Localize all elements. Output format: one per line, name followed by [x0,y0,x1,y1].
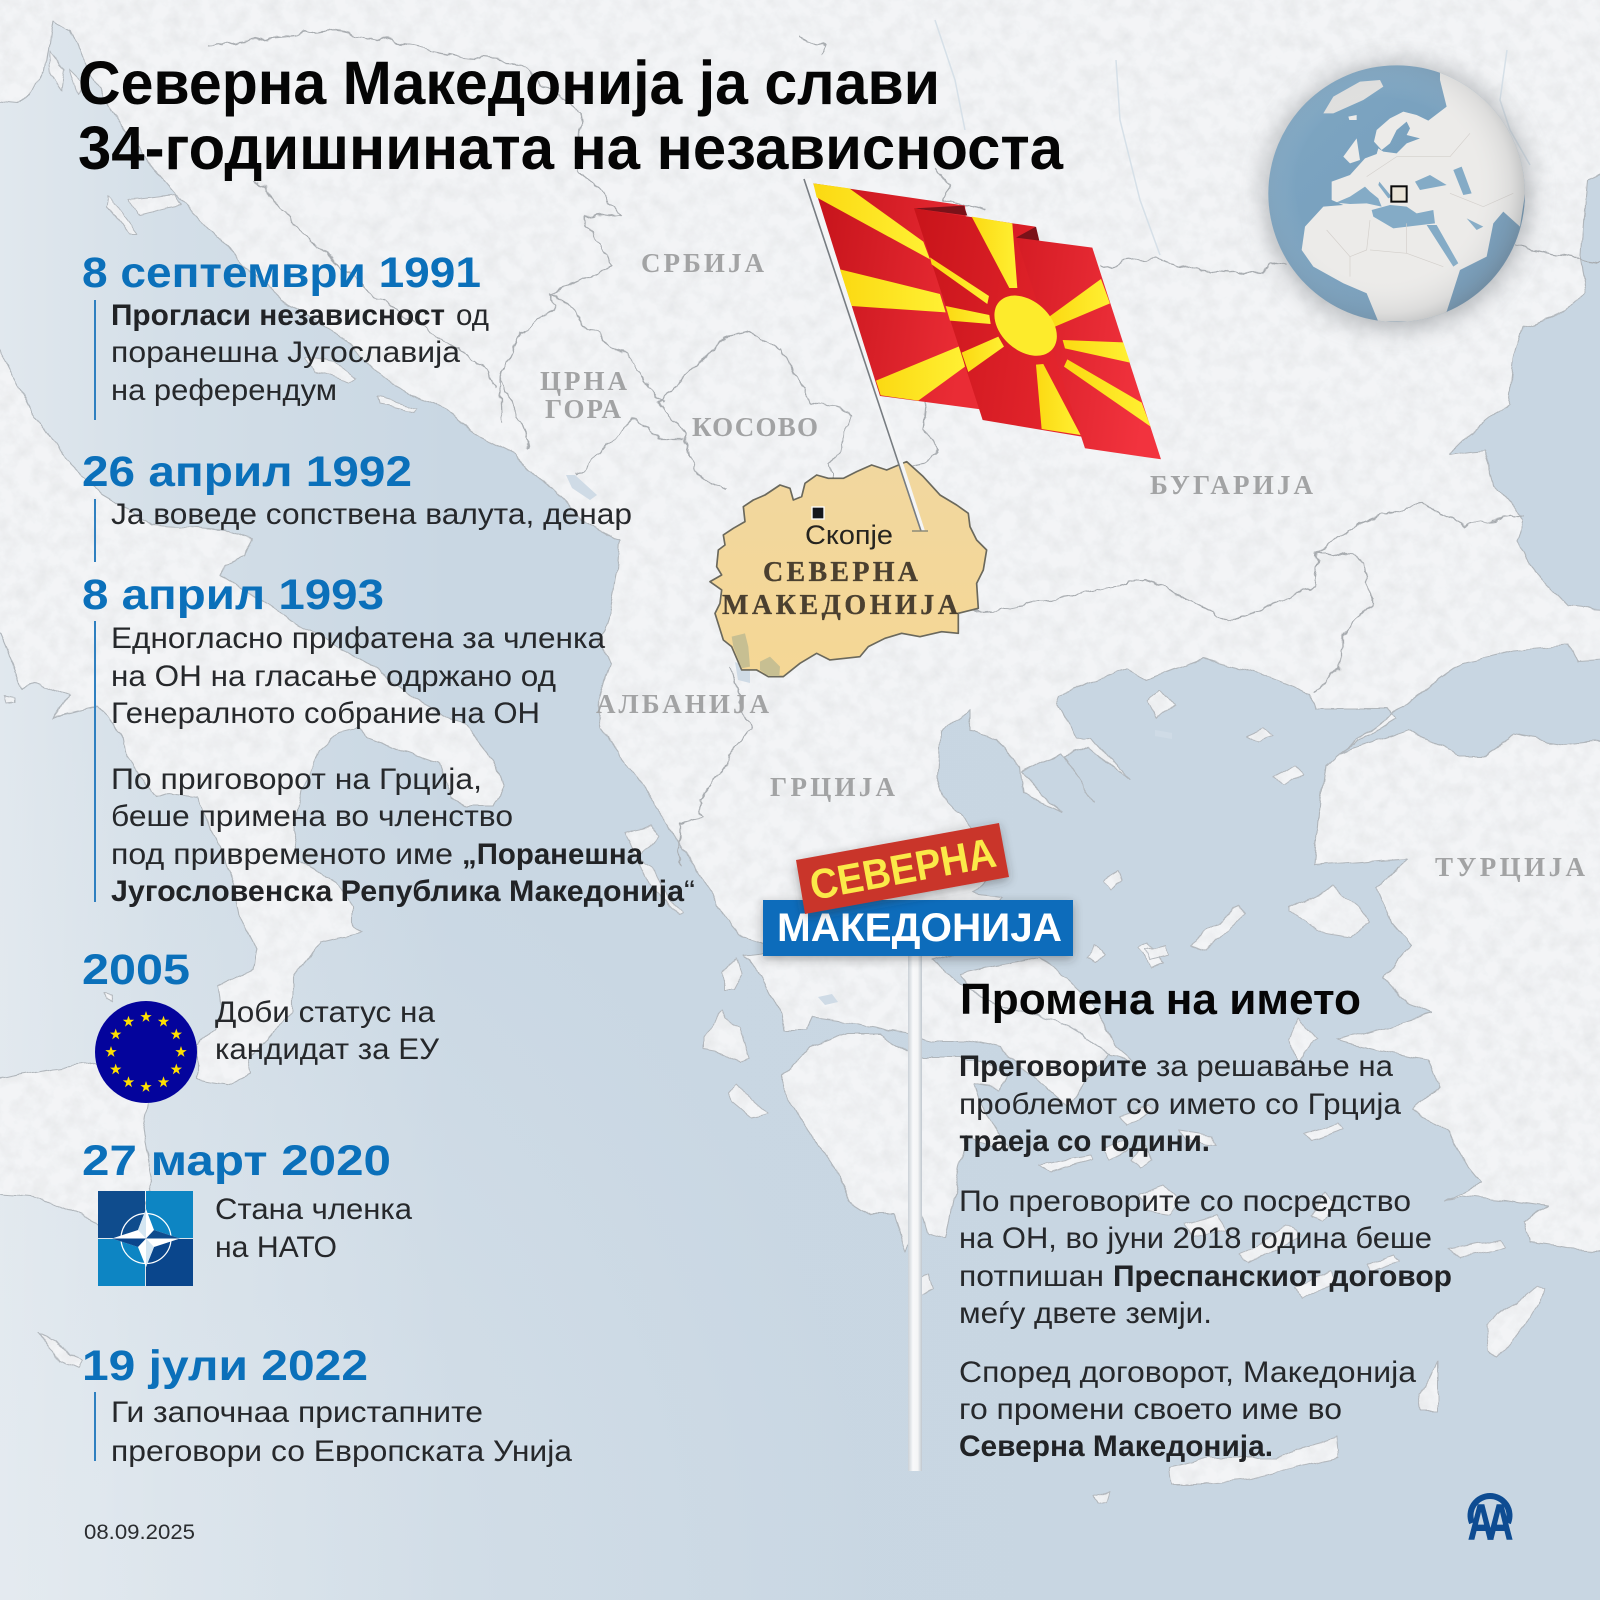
title: 34-годишнината на независноста [78,114,1064,182]
panel: name change: проблемот со името со Грција [959,1088,1401,1121]
timeline: 26 April 1992 [82,448,632,562]
timeline: 19 July 2022: 19 јули 2022 [82,1342,368,1390]
timeline: 2005: 2005 [82,946,190,994]
panel: name change: за решавање на [1156,1050,1393,1083]
map: country borders [209,30,1600,863]
neighbouring country labels: БУГАРИЈА [1150,470,1314,500]
panel: name change: потпишан [959,1260,1104,1293]
panel: name change: меѓу двете земји. [959,1297,1212,1330]
timeline: 8 April 1993: По приговорот на Грција, [111,763,482,796]
Skopje marker and labels: СЕВЕРНА [763,557,919,588]
neighbouring country labels: АЛБАНИЈА [596,689,770,719]
timeline: 8 September 1991: 8 септември 1991 [82,249,481,297]
timeline: 2005 [82,946,440,1066]
icon: Anadolu Agency logo: A [1487,1494,1513,1550]
timeline: 8 September 1991 [82,249,489,420]
neighbouring country labels: ГРЦИЈА [770,772,896,802]
timeline: 8 April 1993: Едногласно прифатена за членка [111,622,605,655]
signpost pole [908,900,922,1471]
locator globe [1266,50,1533,328]
title [78,49,1064,182]
neighbouring country labels: СРБИЈА [641,248,764,278]
timeline: 2005: Доби статус на [215,996,435,1029]
Skopje marker and labels [722,507,959,621]
timeline: 26 April 1992: Ја воведе сопствена валута, денар [111,498,632,531]
neighbouring country labels [540,248,1586,882]
panel: name change: на ОН, во јуни 2018 година беше [959,1222,1432,1255]
street sign: Македонија: МАКЕДОНИЈА [777,906,1062,950]
title: Северна Македонија ја слави [78,49,940,117]
North Macedonia map shape [710,462,987,677]
timeline: 27 March 2020: на НАТО [215,1231,337,1264]
timeline: 27 March 2020 [82,1137,412,1264]
neighbouring country labels: ЦРНА [540,366,628,396]
flag pole [804,178,928,531]
timeline: 8 September 1991: Прогласи независност [111,299,445,332]
timeline: 8 April 1993: Југословенска Република Македонија [111,875,684,908]
timeline: 8 April 1993: “ [684,875,695,908]
timeline: 19 July 2022: преговори со Европската Унија [111,1435,572,1468]
timeline: 8 April 1993: на ОН на гласање одржано од [111,660,556,693]
timeline: 8 September 1991: на референдум [111,374,337,407]
icon: North Macedonia flag [813,183,1161,459]
panel: name change: По преговорите со посредство [959,1185,1411,1218]
neighbouring country labels: ГОРА [545,394,622,424]
panel: name change: траеја со години. [959,1125,1210,1158]
Skopje marker and labels: Скопје [805,520,893,550]
panel: name change: Промена на името [960,975,1361,1024]
panel: name change [959,975,1452,1463]
timeline: 8 April 1993: под привременото име [111,838,453,871]
timeline: 8 September 1991: од [456,299,489,332]
timeline: 8 April 1993: Генералното собрание на ОН [111,697,540,730]
date: 08.09.2025 [84,1521,195,1544]
neighbouring country labels: ТУРЦИЈА [1435,852,1586,882]
panel: name change: Преговорите [959,1050,1147,1083]
timeline: 19 July 2022 [82,1342,572,1468]
icon: EU flag [95,1001,197,1103]
timeline: 2005: кандидат за ЕУ [215,1033,440,1066]
timeline: 27 March 2020: Стана членка [215,1193,412,1226]
Skopje marker and labels: МАКЕДОНИЈА [722,590,959,621]
icon: Anadolu Agency logo: A [1468,1494,1494,1550]
timeline: 8 April 1993: 8 април 1993 [82,571,384,619]
timeline: 26 April 1992: 26 април 1992 [82,448,412,496]
timeline: 19 July 2022: Ги започнаа пристапните [111,1396,483,1429]
timeline: 8 September 1991: поранешна Југославија [111,336,460,369]
map: lakes and rivers [566,20,1530,1005]
timeline: 8 April 1993: беше примена во членство [111,800,513,833]
timeline: 8 April 1993: „Поранешна [462,838,643,871]
panel: name change: Преспанскиот договор [1113,1260,1452,1293]
icon: NATO flag [98,1191,193,1286]
panel: name change: го промени своето име во [959,1393,1342,1426]
timeline: 8 April 1993 [82,571,695,908]
street sign: Северна: СЕВЕРНА [806,829,1000,909]
panel: name change: Северна Македонија. [959,1430,1273,1463]
panel: name change: Според договорот, Македонија [959,1356,1416,1389]
timeline: 27 March 2020: 27 март 2020 [82,1137,391,1185]
neighbouring country labels: КОСОВО [692,412,818,442]
